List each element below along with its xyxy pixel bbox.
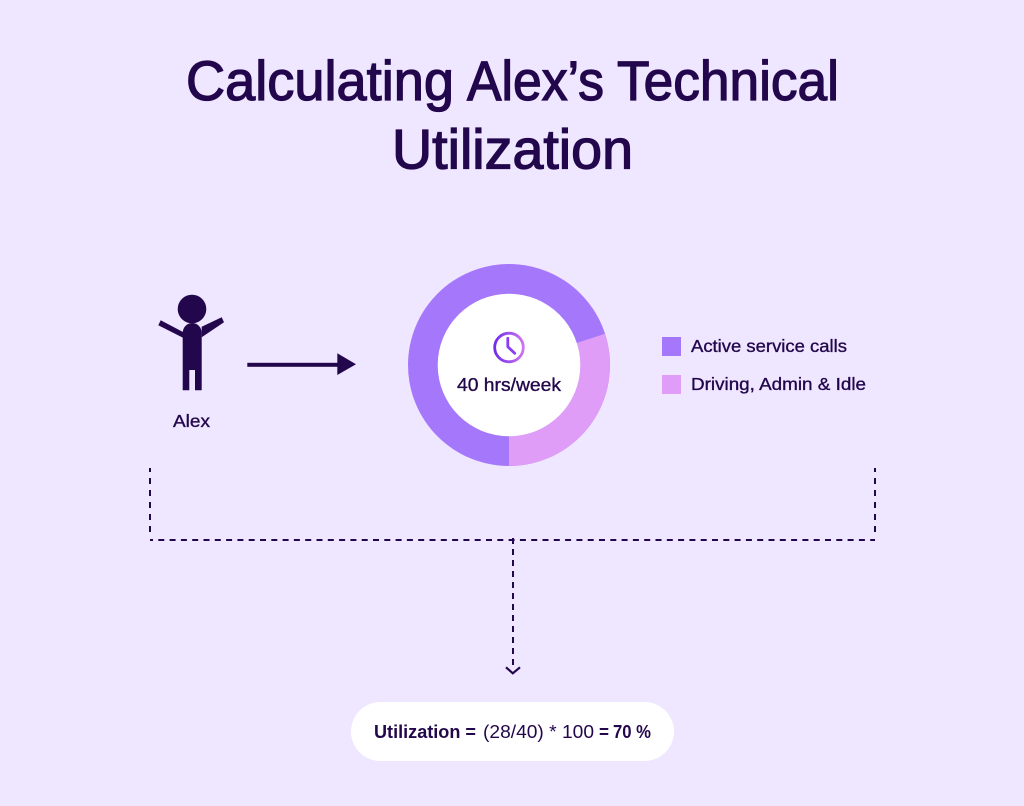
title: Alex’s xyxy=(467,49,604,112)
legend item: active service calls: Active service calls xyxy=(691,336,847,356)
title: Utilization xyxy=(392,118,633,180)
formula text: 70 % xyxy=(613,722,651,742)
formula text xyxy=(374,722,651,742)
segment: active service calls xyxy=(408,264,610,466)
formula pill xyxy=(351,702,674,761)
segment: driving, admin and idle xyxy=(509,334,610,466)
title xyxy=(186,49,839,180)
dashed bracket connector xyxy=(150,468,875,665)
donut centre xyxy=(438,294,580,436)
label: Alex: Alex xyxy=(173,411,210,431)
donut chart xyxy=(408,264,610,466)
arrowhead: down chevron xyxy=(506,667,520,673)
formula text: = xyxy=(599,722,609,742)
icon: clock xyxy=(495,333,523,362)
icon: Alex person figure xyxy=(158,295,224,390)
legend item: driving, admin and idle: Driving, Admin & Idle xyxy=(691,374,866,394)
title: Calculating xyxy=(186,49,454,112)
formula text: Utilization = xyxy=(374,722,476,742)
legend xyxy=(662,336,866,394)
title: Technical xyxy=(617,49,839,112)
arrow: Alex to donut xyxy=(247,353,356,375)
formula text: (28/40) * 100 xyxy=(483,722,594,742)
centre label: 40 hrs/week xyxy=(457,375,562,395)
